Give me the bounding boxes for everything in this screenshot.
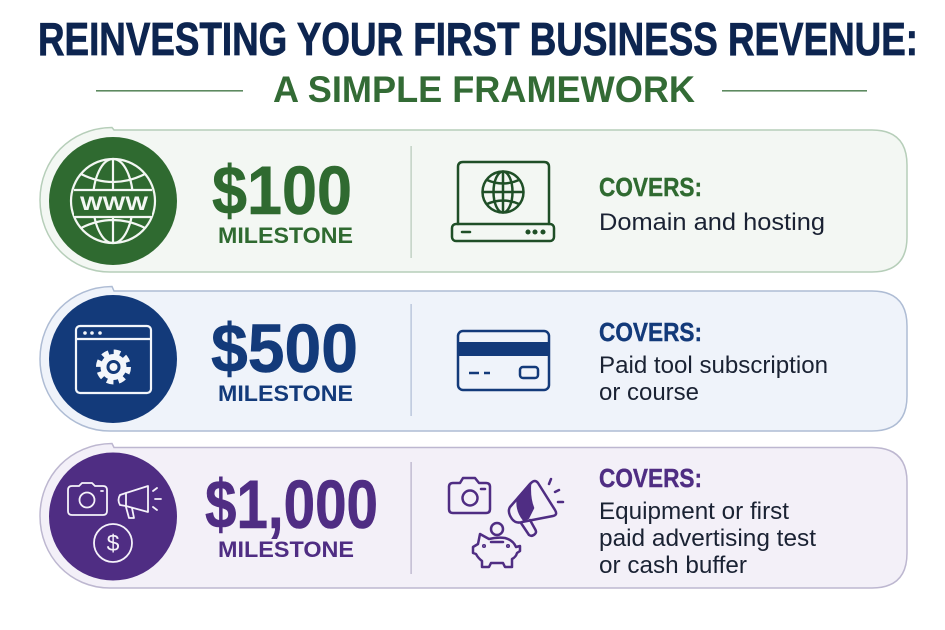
covers text: or course xyxy=(599,379,699,406)
covers text xyxy=(599,463,816,579)
milestone label: MILESTONE xyxy=(218,223,353,248)
panel: $100 milestone xyxy=(40,128,907,272)
covers text: Equipment or first xyxy=(599,498,789,525)
panel: $1,000 milestone xyxy=(40,444,907,588)
icon: laptop with globe xyxy=(452,162,554,241)
icon: camera, megaphone and piggy bank xyxy=(449,478,563,567)
covers text: Domain and hosting xyxy=(599,209,825,236)
milestone label: MILESTONE xyxy=(218,381,353,406)
covers text: Paid tool subscription xyxy=(599,352,828,379)
panel background xyxy=(40,128,907,272)
icon: www globe xyxy=(49,137,177,265)
covers text: COVERS: xyxy=(599,172,702,202)
covers text xyxy=(599,317,828,406)
covers text: COVERS: xyxy=(599,317,702,347)
amount: $100 xyxy=(212,152,352,229)
icon: credit card xyxy=(458,331,549,390)
panel background xyxy=(40,444,907,588)
amount: $1,000 xyxy=(205,466,378,543)
icon: camera, megaphone and dollar: $ xyxy=(107,530,120,556)
covers text: paid advertising test xyxy=(599,525,816,552)
milestone label: MILESTONE xyxy=(218,537,354,562)
panel: $500 milestone xyxy=(40,286,907,431)
icon: camera, megaphone and dollar xyxy=(49,452,177,580)
subtitle: A SIMPLE FRAMEWORK xyxy=(273,69,695,110)
covers text xyxy=(599,172,825,236)
covers text: or cash buffer xyxy=(599,552,747,579)
panel background xyxy=(40,286,907,431)
icon: www globe: WWW xyxy=(80,194,148,215)
covers text: COVERS: xyxy=(599,463,702,493)
icon: browser with gear xyxy=(49,295,177,423)
amount: $500 xyxy=(211,310,358,387)
